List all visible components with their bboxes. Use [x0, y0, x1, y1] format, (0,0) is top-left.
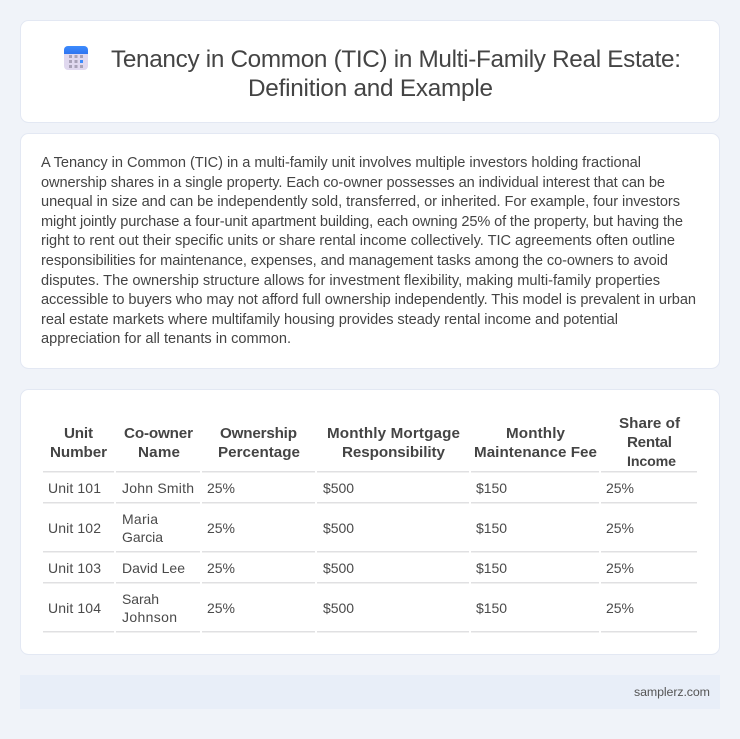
table row: Unit 102: $150: [476, 520, 507, 536]
title: [111, 46, 681, 102]
text block: definition paragraph: might jointly purchase a four-unit apartment building, each owning 25% of the property, but having the: [41, 214, 683, 230]
icon: calendar: [64, 46, 88, 70]
panel: ownership table: [20, 390, 720, 654]
title: Definition and Example: [248, 75, 493, 102]
text block: definition paragraph: responsibilities for maintenance, expenses, and management tasks among the co-owners to avoid: [41, 253, 668, 269]
text block: definition paragraph: appreciation for all tenants in common.: [41, 331, 291, 347]
table row: Unit 102: [48, 511, 634, 545]
table header: Co-owner: [124, 425, 193, 442]
table row: Unit 103: Unit 103: [48, 560, 101, 576]
table header: Number: [50, 444, 107, 461]
text block: definition paragraph: accessible to buyers who may not afford full ownership independently. This model is prevalent in urban: [41, 292, 696, 308]
panel: title card: [20, 20, 720, 122]
table row: Unit 101: $150: [476, 480, 507, 496]
text block: definition paragraph: disputes. The ownership structure allows for investment flexibility, making multi-family properties: [41, 273, 660, 289]
table row: Unit 103: $500: [323, 560, 354, 576]
table row: Unit 102: Maria: [122, 511, 158, 527]
table row: Unit 104: $150: [476, 600, 507, 616]
table row lines: [43, 471, 697, 632]
table header: Monthly Mortgage: [327, 425, 460, 442]
table row: Unit 104: $500: [323, 600, 354, 616]
text block: definition paragraph: unequal in size and can be independently sold, transferred, or inherited. For example, four investors: [41, 194, 680, 210]
table header: Percentage: [218, 444, 300, 461]
text block: definition paragraph: ownership shares in a single property. Each co-owner possesses an individual interest that can be: [41, 175, 665, 191]
table header: Monthly: [506, 425, 566, 442]
table row: Unit 101: $500: [323, 480, 354, 496]
table header: Name: [138, 444, 180, 461]
table row: Unit 101: [48, 480, 634, 496]
table row: Unit 101: 25%: [606, 480, 634, 496]
table row: Unit 101: John Smith: [122, 480, 194, 496]
table row: Unit 103: 25%: [207, 560, 235, 576]
table row: Unit 103: [48, 560, 634, 576]
table header: Unit: [64, 425, 93, 442]
table row: Unit 104: [48, 591, 634, 625]
footer: samplerz.com: [634, 685, 710, 699]
table header: Ownership: [220, 425, 297, 442]
text block: definition paragraph: [41, 155, 696, 347]
table row: Unit 104: Sarah: [122, 591, 159, 607]
table header: [50, 415, 681, 470]
table row: Unit 103: 25%: [606, 560, 634, 576]
table row: Unit 102: $500: [323, 520, 354, 536]
table row: Unit 104: Johnson: [122, 609, 177, 625]
table row: Unit 101: Unit 101: [48, 480, 101, 496]
table row: Unit 103: David Lee: [122, 560, 185, 576]
table row: Unit 101: 25%: [207, 480, 235, 496]
table row: Unit 104: 25%: [606, 600, 634, 616]
table header: Maintenance Fee: [474, 444, 597, 461]
table row: Unit 102: 25%: [207, 520, 235, 536]
table header: Rental: [627, 434, 672, 451]
table row: Unit 104: Unit 104: [48, 600, 101, 616]
table row: Unit 102: Unit 102: [48, 520, 101, 536]
text block: definition paragraph: A Tenancy in Common (TIC) in a multi-family unit involves multiple investors holding fractional: [41, 155, 641, 171]
table header: Income: [627, 454, 676, 470]
title: Tenancy in Common (TIC) in Multi-Family Real Estate:: [111, 46, 681, 73]
text block: definition paragraph: real estate markets where multifamily housing provides steady rental income and potential: [41, 312, 618, 328]
table header: Share of: [619, 415, 681, 432]
table row: Unit 102: 25%: [606, 520, 634, 536]
table row: Unit 104: 25%: [207, 600, 235, 616]
panel: definition text: [20, 134, 720, 368]
text block: definition paragraph: right to rent out their specific units or share rental income collectively. TIC agreements often outline: [41, 233, 675, 249]
table header: Responsibility: [342, 444, 446, 461]
table row: Unit 102: Garcia: [122, 529, 163, 545]
table row: Unit 103: $150: [476, 560, 507, 576]
footer: [20, 675, 720, 709]
